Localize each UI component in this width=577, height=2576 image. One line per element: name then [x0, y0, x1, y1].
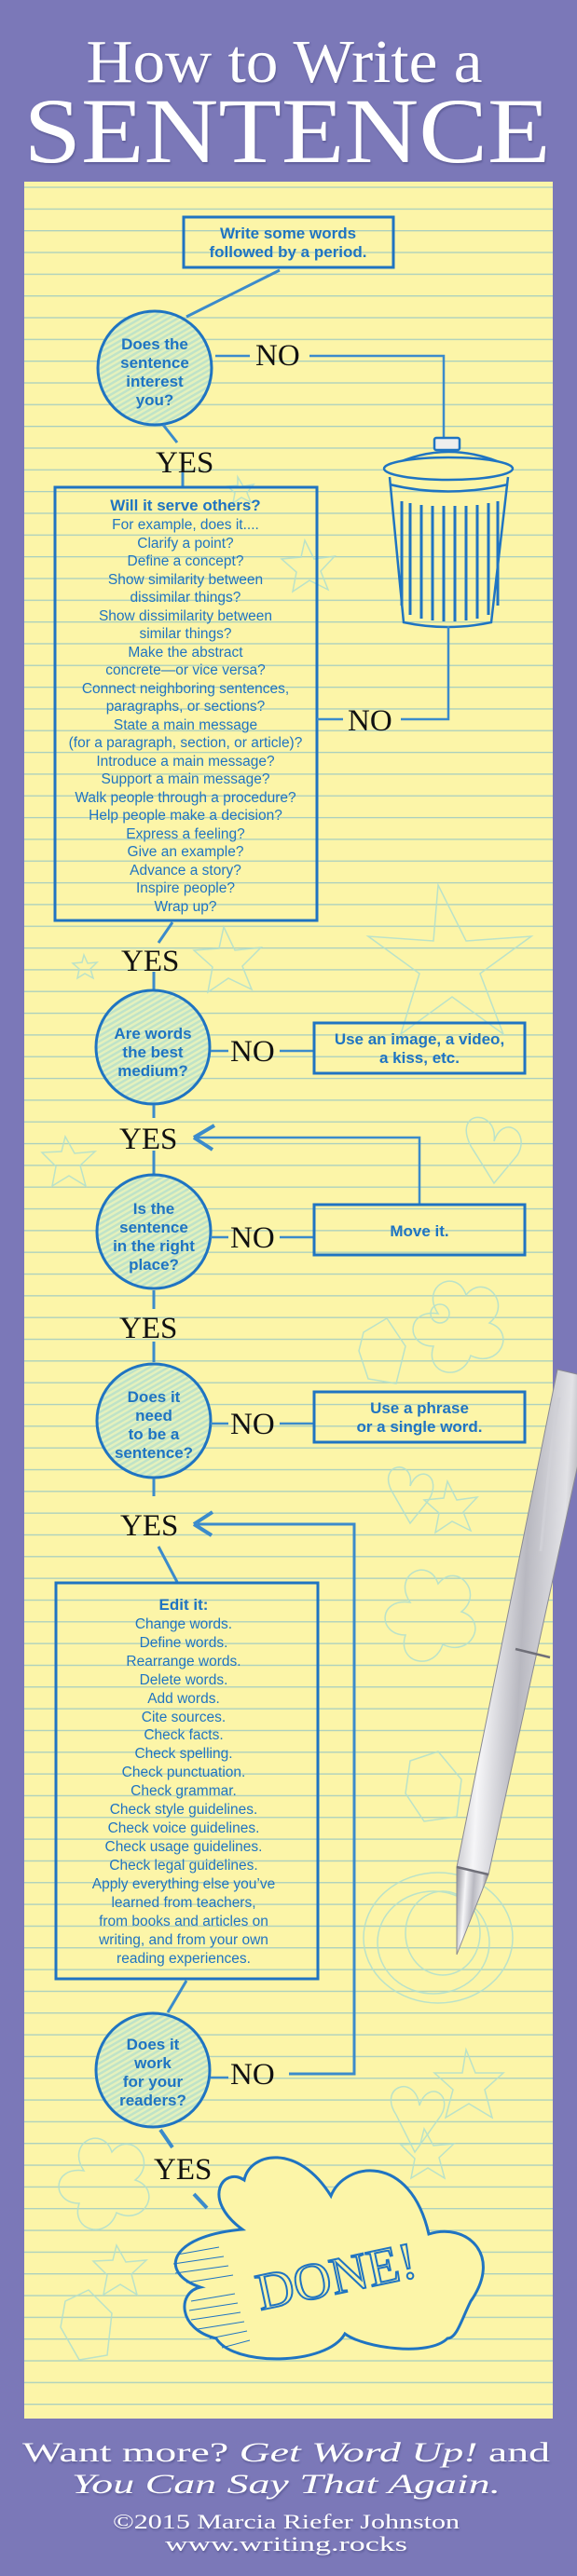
YES 5 with return arrow: [120, 1479, 354, 2074]
circle: are words the best medium: Are words: [114, 1025, 192, 1043]
panel: edit it: Change words.: [135, 1616, 232, 1632]
panel: will it serve others: State a main message: [114, 717, 257, 733]
YES 1: YES: [156, 446, 213, 480]
circle: is the sentence in the right place: [97, 1175, 211, 1288]
panel: will it serve others: Make the abstract: [128, 645, 243, 661]
YES 6: YES: [154, 2153, 212, 2187]
doodles: [42, 477, 531, 2360]
circle: does it work for your readers: for your: [123, 2073, 183, 2091]
circle: does it need to be a sentence: need: [135, 1407, 172, 1424]
NO 1 with line to trash: NO: [255, 339, 300, 373]
circle: is the sentence in the right place: Is the: [133, 1200, 174, 1218]
YES 2: [121, 922, 179, 990]
NO 1 with line to trash: [215, 339, 444, 438]
panel: will it serve others: Advance a story?: [130, 863, 241, 879]
panel: will it serve others: Show similarity between: [108, 572, 263, 588]
panel: will it serve others: Show dissimilarity between: [99, 608, 272, 624]
panel: edit it: Apply everything else you’ve: [92, 1876, 275, 1892]
panel: edit it: Check facts.: [144, 1727, 224, 1743]
panel: edit it: Define words.: [140, 1635, 227, 1651]
circle: are words the best medium: the best: [122, 1043, 184, 1061]
footer text: Want more? Get Word Up! and: [22, 2437, 550, 2468]
title: How to Write a: [86, 28, 483, 96]
circle: does the sentence interest you: Does the: [121, 335, 188, 353]
panel: will it serve others: Wrap up?: [155, 899, 217, 915]
NO 5: [211, 1408, 314, 1441]
callout: done cloud: [173, 2158, 483, 2359]
box: use an image: a kiss, etc.: [379, 1049, 460, 1067]
panel: edit it: Rearrange words.: [126, 1654, 241, 1670]
box: use a phrase: or a single word.: [356, 1418, 483, 1436]
box: use a phrase: Use a phrase: [370, 1399, 469, 1417]
panel: edit it: Add words.: [147, 1691, 220, 1707]
circle: is the sentence in the right place: sentence: [119, 1219, 188, 1236]
circle: does it need to be a sentence: to be a: [129, 1425, 180, 1443]
icon: pen: [457, 1370, 577, 1955]
footer text: www.writing.rocks: [165, 2532, 407, 2556]
NO 6: [211, 2058, 275, 2092]
footer text: You Can Say That Again.: [72, 2469, 501, 2500]
NO 2 back to trash: NO: [348, 704, 392, 738]
box: use a phrase: [314, 1392, 525, 1442]
panel: will it serve others: Clarify a point?: [137, 536, 234, 552]
YES 4: YES: [119, 1312, 177, 1345]
YES 4: [119, 1290, 177, 1362]
panel: edit it: Edit it:: [159, 1596, 208, 1614]
panel: edit it: Check spelling.: [134, 1746, 233, 1762]
NO 4: [211, 1221, 314, 1255]
arrow: edit box to circle 6: [168, 1981, 186, 2012]
YES 3 with return arrow: YES: [119, 1123, 177, 1156]
circle: are words the best medium: [96, 990, 210, 1104]
panel: will it serve others: Support a main message?: [102, 771, 270, 787]
NO 2 back to trash: [317, 626, 448, 738]
NO 3: [211, 1035, 314, 1069]
panel: edit it: Cite sources.: [142, 1710, 226, 1725]
icon: trash can: [384, 438, 513, 627]
panel: will it serve others: (for a paragraph, section, or article)?: [69, 735, 303, 751]
panel: edit it: Check punctuation.: [122, 1765, 245, 1780]
circle: does it need to be a sentence: [97, 1364, 211, 1478]
panel: will it serve others: Connect neighboring sentences,: [82, 681, 289, 697]
panel: edit it: Check style guidelines.: [110, 1802, 257, 1818]
panel: will it serve others: [55, 487, 317, 920]
panel: edit it: from books and articles on: [99, 1914, 268, 1929]
circle: does the sentence interest you: sentence: [120, 354, 189, 372]
panel: will it serve others: Will it serve others?: [110, 497, 261, 514]
circle: does it work for your readers: Does it: [127, 2036, 180, 2053]
panel: will it serve others: Introduce a main message?: [96, 754, 275, 770]
circle: does the sentence interest you: you?: [136, 391, 173, 409]
panel: edit it: Delete words.: [140, 1672, 227, 1688]
NO 6: NO: [230, 2058, 275, 2092]
YES 5 with return arrow: YES: [120, 1509, 178, 1543]
panel: will it serve others: Inspire people?: [136, 880, 235, 896]
title: [24, 28, 550, 183]
panel: will it serve others: concrete—or vice versa?: [105, 662, 266, 678]
callout: done cloud: DONE!: [251, 2231, 421, 2322]
panel: edit it: [56, 1583, 318, 1979]
panel: will it serve others: Define a concept?: [128, 553, 244, 569]
circle: does the sentence interest you: [98, 311, 212, 425]
box: use an image: Use an image, a video,: [335, 1030, 504, 1048]
NO 5: NO: [230, 1408, 275, 1441]
panel: will it serve others: paragraphs, or sections?: [106, 699, 266, 715]
circle: does it need to be a sentence: sentence?: [115, 1444, 193, 1462]
panel: will it serve others: Give an example?: [128, 844, 244, 860]
panel: will it serve others: For example, does it....: [112, 517, 259, 533]
box: write some words: [184, 217, 393, 267]
box: write some words: followed by a period.: [209, 243, 367, 261]
footer text: ©2015 Marcia Riefer Johnston: [113, 2510, 460, 2533]
circle: does the sentence interest you: interest: [126, 373, 184, 390]
circle: are words the best medium: medium?: [117, 1062, 188, 1080]
panel: edit it: learned from teachers,: [111, 1895, 256, 1911]
panel: will it serve others: similar things?: [139, 626, 232, 642]
circle: does it work for your readers: readers?: [119, 2092, 186, 2109]
panel: will it serve others: Express a feeling?: [126, 826, 245, 842]
panel: edit it: Check usage guidelines.: [105, 1839, 262, 1855]
circle: does it need to be a sentence: Does it: [128, 1388, 181, 1406]
footer text: [22, 2437, 550, 2556]
circle: does it work for your readers: work: [133, 2054, 172, 2072]
circle: is the sentence in the right place: in the right: [113, 1237, 195, 1255]
panel: edit it: Check legal guidelines.: [109, 1858, 258, 1874]
panel: will it serve others: dissimilar things?: [131, 590, 241, 606]
arrow: box to circle 1: [186, 270, 280, 317]
NO 3: NO: [230, 1035, 275, 1069]
YES 6: [154, 2130, 212, 2208]
panel: edit it: reading experiences.: [117, 1951, 251, 1967]
YES 1: [156, 425, 213, 487]
circle: is the sentence in the right place: place?: [129, 1256, 179, 1274]
panel: will it serve others: Help people make a decision?: [89, 808, 282, 824]
panel: will it serve others: Walk people through a procedure?: [75, 790, 296, 806]
panel: edit it: Check voice guidelines.: [108, 1820, 259, 1836]
panel: notepad paper: [24, 182, 553, 2419]
box: move it: [314, 1205, 525, 1255]
title: SENTENCE: [24, 79, 550, 183]
box: move it: Move it.: [390, 1222, 449, 1240]
box: use an image: [314, 1023, 525, 1073]
NO 4: NO: [230, 1221, 275, 1255]
YES 2: YES: [121, 945, 179, 978]
panel: edit it: writing, and from your own: [98, 1932, 268, 1948]
box: write some words: Write some words: [220, 225, 356, 242]
YES 3 with return arrow: [119, 1105, 419, 1205]
panel: edit it: Check grammar.: [131, 1783, 237, 1799]
circle: does it work for your readers: [96, 2013, 210, 2127]
